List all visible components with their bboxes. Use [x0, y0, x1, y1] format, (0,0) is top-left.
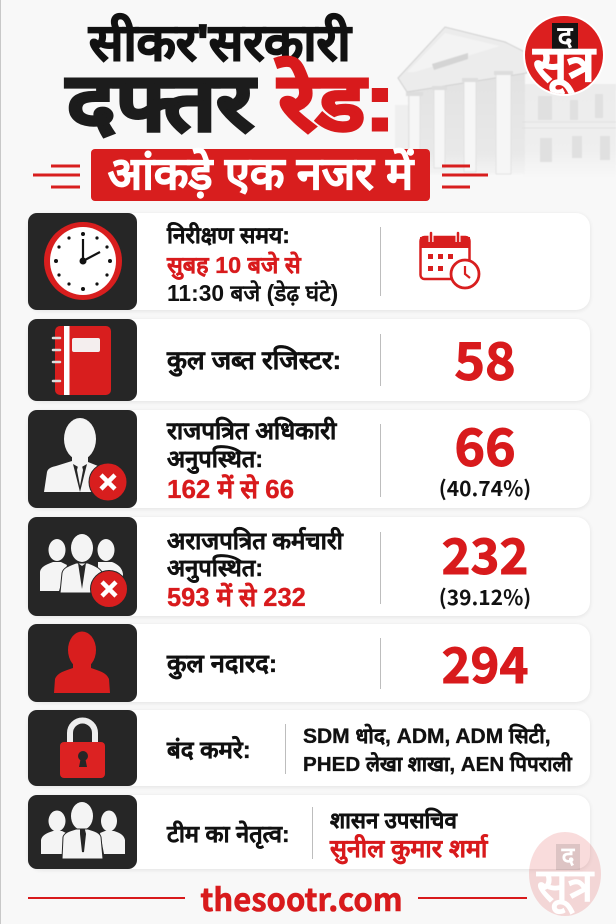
- banner speed lines left: [33, 164, 80, 188]
- page edge: [0, 0, 1, 924]
- watermark logo: सूत्र: [537, 859, 593, 911]
- logo: the sootr: सूत्र: [533, 36, 595, 92]
- value: 66 of 162: 162 में से 66: [167, 474, 294, 504]
- title line one: सीकर'सरकारी: [89, 14, 351, 71]
- icon tile: team: [28, 795, 137, 869]
- panel: closed rooms: [28, 710, 590, 786]
- footer rule left: [28, 897, 185, 899]
- panel: inspection time: [28, 213, 590, 310]
- value: 58: 58: [454, 320, 516, 395]
- value: 232 of 593: 593 में से 232: [167, 584, 306, 612]
- icon tile: person: [28, 624, 137, 702]
- logo: the sootr: [523, 14, 605, 96]
- value: 232: 232: [442, 518, 528, 589]
- icon tile: officer: [28, 410, 137, 508]
- title line two: दफ्तर रेड:: [67, 58, 395, 147]
- value: deputy secretary: शासन उपसचिव: [330, 808, 457, 833]
- footer website: thesootr.com: [200, 875, 403, 920]
- label: gazetted officers: राजपत्रित अधिकारी: [167, 418, 336, 445]
- label: inspection time: निरीक्षण समय:: [167, 222, 290, 248]
- panel: non-gazetted staff absent: [28, 517, 590, 616]
- icon tile: register: [28, 319, 137, 401]
- percent: 39.12: (39.12%): [439, 582, 531, 612]
- panel: team leadership: [28, 795, 590, 869]
- illustration: government building: [396, 26, 616, 174]
- list: closed rooms line one: SDM धोद, ADM, ADM सिटी,: [303, 725, 551, 748]
- panel: total absent: [28, 624, 590, 702]
- icon tile: clock: [28, 213, 137, 310]
- icon tile: staff: [28, 517, 137, 616]
- value: 294: 294: [442, 627, 528, 698]
- value: sunil kumar sharma: सुनील कुमार शर्मा: [330, 835, 487, 863]
- watermark logo: द: [562, 843, 574, 870]
- value: to 11:30: 11:30 बजे (डेढ़ घंटे): [167, 280, 338, 306]
- label: non-gazetted staff: अराजपत्रित कर्मचारी: [167, 528, 343, 555]
- footer rule right: [418, 897, 527, 899]
- logo: the sootr: द: [558, 21, 572, 52]
- panel: gazetted officers absent: [28, 410, 590, 508]
- list: closed rooms line two: PHED लेखा शाखा, AEN पिपराली: [303, 753, 572, 776]
- label: absent: अनुपस्थित:: [167, 447, 263, 473]
- panel: seized registers: [28, 319, 590, 401]
- label: team leader: टीम का नेतृत्व:: [167, 821, 290, 847]
- percent: 40.74: (40.74%): [439, 473, 531, 503]
- banner speed lines right: [442, 164, 488, 188]
- icon tile: lock: [28, 710, 137, 786]
- value: from 10 am: सुबह 10 बजे से: [167, 252, 301, 278]
- label: closed rooms: बंद कमरे:: [167, 737, 251, 764]
- watermark logo: [529, 832, 601, 916]
- label: seized registers: कुल जब्त रजिस्टर:: [167, 345, 341, 375]
- label: absent: अनुपस्थित:: [167, 556, 263, 582]
- label: total absent: कुल नदारद:: [167, 650, 277, 678]
- value: 66: 66: [454, 406, 516, 481]
- subtitle banner: आंकड़े एक नजर में: [108, 148, 413, 199]
